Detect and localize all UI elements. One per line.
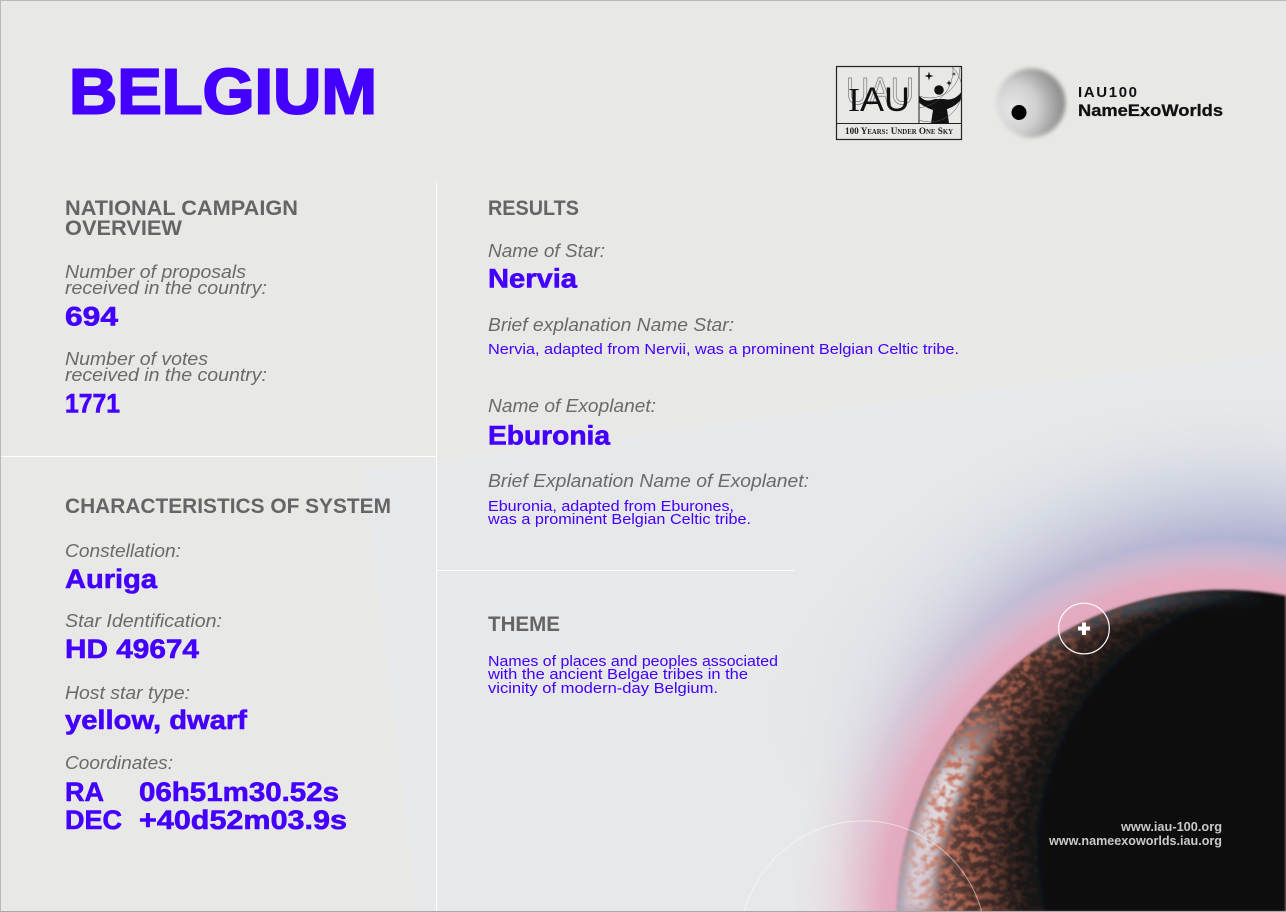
logo: IAU 100 years: IAU bbox=[848, 81, 910, 119]
sphere emblem bbox=[996, 68, 1066, 138]
website links: www.iau-100.org bbox=[1120, 820, 1222, 834]
votes label: received in the country: bbox=[65, 365, 267, 385]
planet body bbox=[897, 590, 1286, 912]
panel: results bbox=[487, 197, 959, 528]
logo: IAU100 NameExoWorlds bbox=[996, 68, 1223, 138]
planet surface texture bbox=[897, 590, 1286, 912]
coordinates values: 06h51m30.52s bbox=[139, 777, 339, 807]
blue atmosphere glow bbox=[862, 447, 1286, 792]
website links bbox=[1048, 820, 1222, 848]
theme text bbox=[487, 654, 778, 697]
faint orbit circle bbox=[744, 821, 982, 912]
votes label: Number of votes bbox=[65, 349, 208, 369]
constellation value: Auriga bbox=[65, 564, 158, 594]
star name value: Nervia bbox=[488, 264, 578, 294]
logo: IAU 100 years: 100 Years: Under One Sky bbox=[845, 127, 953, 137]
exoplanet explanation text bbox=[487, 499, 751, 528]
star identification label: Star Identification: bbox=[65, 611, 222, 631]
heading: OVERVIEW bbox=[65, 217, 182, 240]
exoplanet explanation text: was a prominent Belgian Celtic tribe. bbox=[487, 512, 751, 528]
theme text: with the ancient Belgae tribes in the bbox=[487, 667, 748, 683]
heading: RESULTS bbox=[488, 197, 579, 220]
proposals value: 694 bbox=[65, 302, 118, 332]
panel: characteristics of system bbox=[65, 495, 391, 835]
proposals label bbox=[65, 262, 267, 298]
logo: IAU 100 years: UAU bbox=[846, 71, 914, 113]
logo: IAU100 NameExoWorlds: NameExoWorlds bbox=[1078, 101, 1223, 120]
title: BELGIUM bbox=[69, 56, 377, 128]
planet illustration bbox=[821, 447, 1286, 911]
coordinates values: RA bbox=[65, 777, 104, 807]
panel: theme bbox=[487, 613, 778, 697]
star identification value: HD 49674 bbox=[65, 634, 199, 664]
theme text: vicinity of modern-day Belgium. bbox=[488, 681, 718, 697]
proposals label: Number of proposals bbox=[65, 262, 246, 282]
coordinates values bbox=[65, 777, 347, 835]
star explanation text: Nervia, adapted from Nervii, was a prominent Belgian Celtic tribe. bbox=[488, 342, 959, 358]
constellation label: Constellation: bbox=[65, 541, 181, 561]
website links: www.nameexoworlds.iau.org bbox=[1048, 834, 1222, 848]
hotspot marker bbox=[1059, 603, 1109, 654]
panel: national campaign overview bbox=[65, 197, 298, 418]
votes label bbox=[65, 349, 267, 385]
heading: CHARACTERISTICS OF SYSTEM bbox=[65, 495, 391, 518]
coordinates values: +40d52m03.9s bbox=[139, 805, 347, 835]
exoplanet name label: Name of Exoplanet: bbox=[488, 396, 656, 416]
logo: IAU100 NameExoWorlds: IAU100 bbox=[1078, 84, 1137, 101]
coordinates label: Coordinates: bbox=[65, 753, 173, 773]
heading: NATIONAL CAMPAIGN bbox=[65, 197, 298, 220]
exoplanet name value: Eburonia bbox=[488, 420, 611, 450]
host star type label: Host star type: bbox=[65, 683, 190, 703]
planet limb highlight bbox=[918, 597, 1262, 912]
star name label: Name of Star: bbox=[488, 241, 605, 261]
exoplanet explanation label: Brief Explanation Name of Exoplanet: bbox=[488, 471, 809, 491]
votes value: 1771 bbox=[65, 388, 120, 418]
theme text: Names of places and peoples associated bbox=[488, 654, 778, 670]
exoplanet explanation text: Eburonia, adapted from Eburones, bbox=[488, 499, 734, 515]
host star type value: yellow, dwarf bbox=[65, 705, 248, 735]
proposals label: received in the country: bbox=[65, 278, 267, 298]
logo: IAU 100 years bbox=[836, 66, 962, 140]
coordinates values: DEC bbox=[65, 805, 122, 835]
pink atmosphere glow bbox=[640, 390, 1286, 912]
divider lines bbox=[1, 183, 794, 912]
light background wedge bbox=[363, 352, 1286, 912]
heading: THEME bbox=[488, 613, 560, 636]
star explanation label: Brief explanation Name Star: bbox=[488, 315, 734, 335]
heading bbox=[65, 197, 298, 240]
